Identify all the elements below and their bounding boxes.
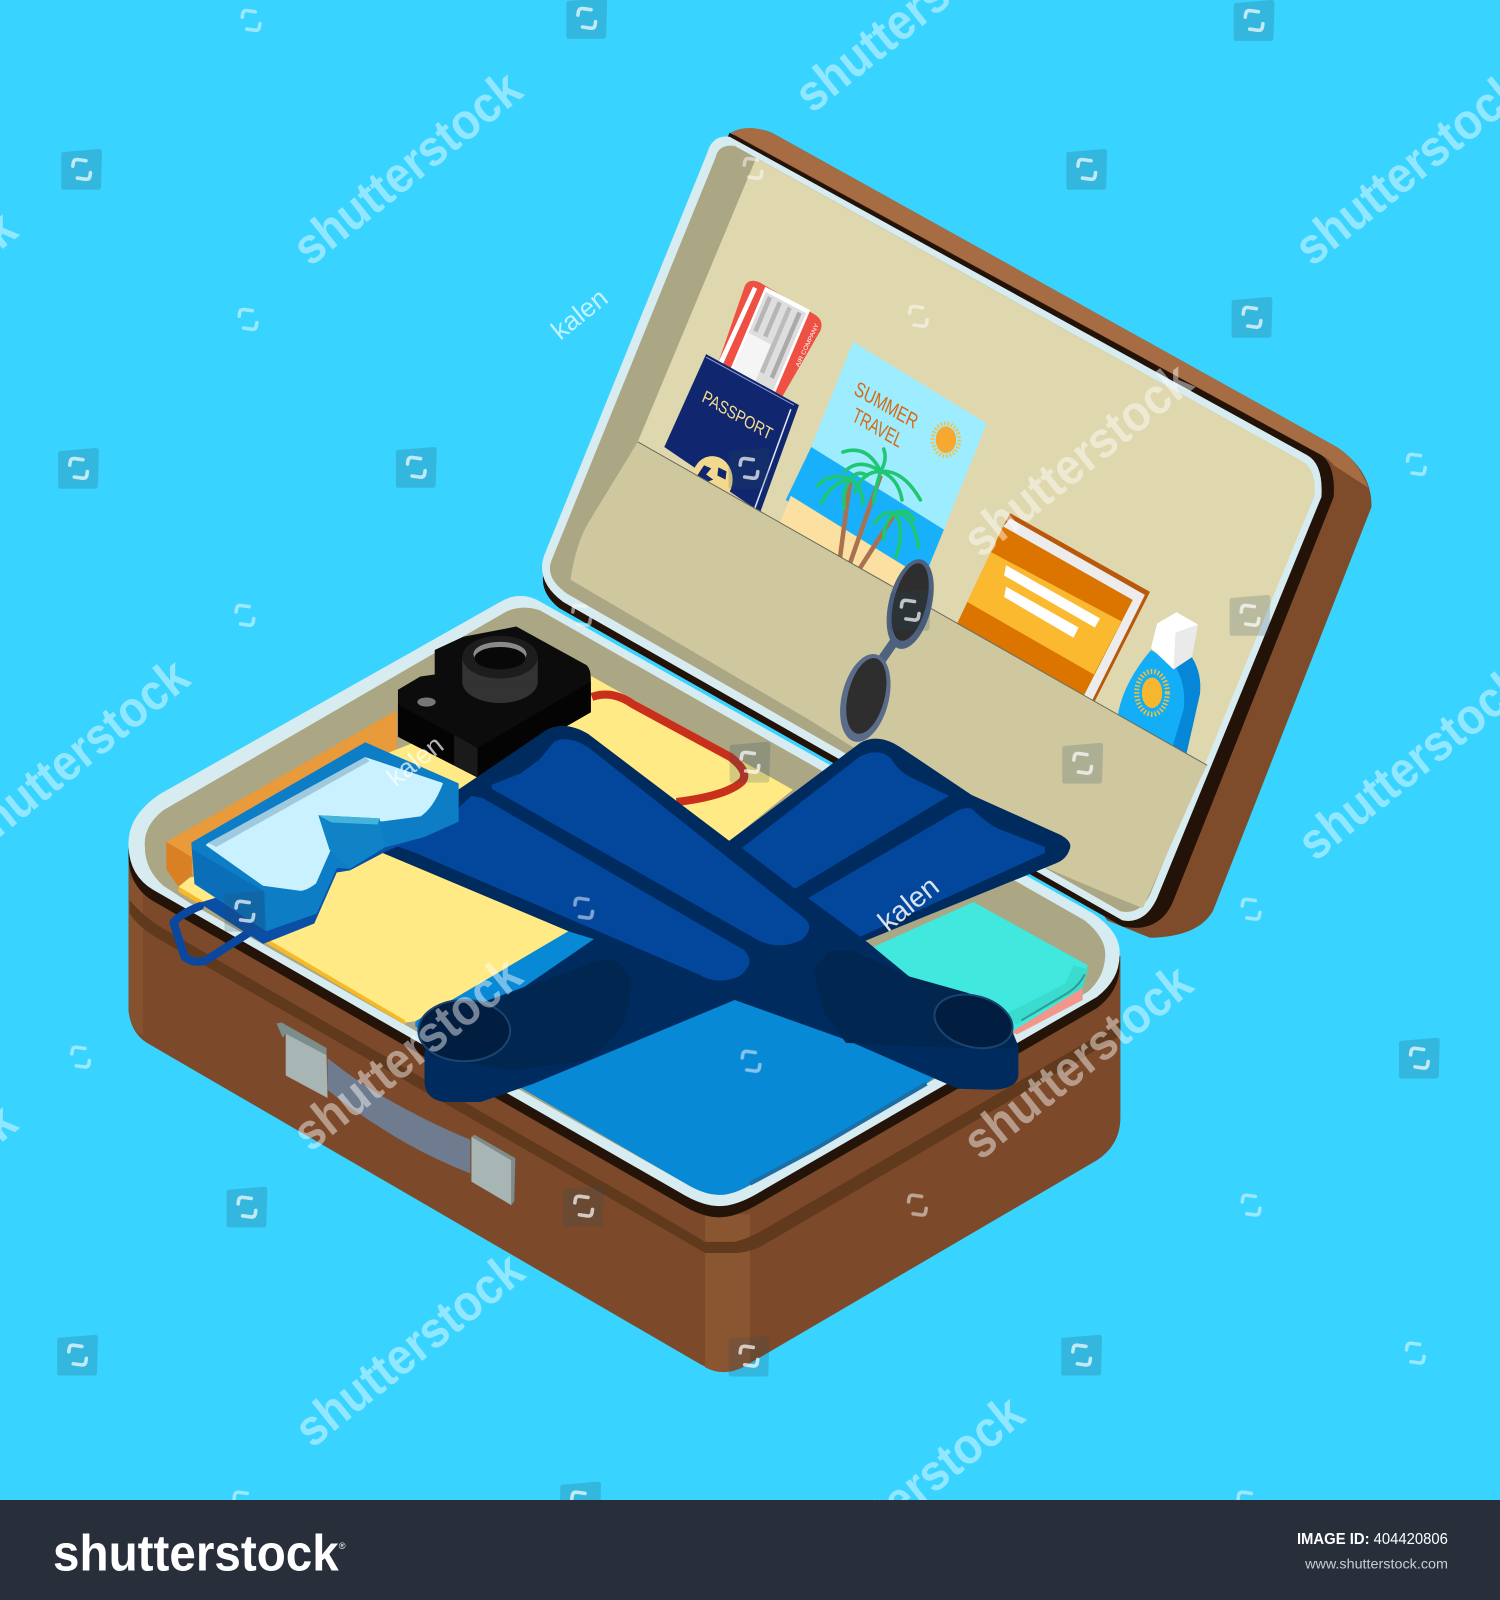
fin foot sole bbox=[427, 960, 631, 1070]
kalen marks bbox=[381, 282, 945, 938]
kalen marks: kalen bbox=[545, 282, 613, 345]
boarding ticket bbox=[718, 281, 822, 403]
packed clothes bbox=[166, 673, 1088, 1195]
camera bbox=[398, 627, 591, 778]
kalen marks: kalen bbox=[381, 729, 449, 792]
dark edge under rim bbox=[128, 607, 1120, 1217]
base rim bbox=[128, 596, 1120, 1206]
fin foot sole bbox=[813, 950, 1016, 1048]
mask nose bbox=[318, 815, 385, 868]
ticket label: AIR COMPANY bbox=[794, 323, 821, 368]
blue towel bbox=[415, 931, 949, 1195]
sunscreen bottle bbox=[1117, 612, 1200, 757]
mask frame bbox=[192, 743, 458, 931]
yellow towel lower bbox=[179, 847, 571, 1022]
bottle cap bbox=[1151, 612, 1198, 669]
watermark text: shutterstock bbox=[783, 1383, 1035, 1600]
lid inner side bbox=[550, 146, 1315, 912]
lid pocket bbox=[570, 442, 1207, 908]
book bbox=[957, 513, 1150, 707]
red trimmed item bbox=[592, 695, 744, 802]
diving mask bbox=[173, 743, 458, 962]
base body bbox=[129, 847, 1120, 1371]
suitcase base bbox=[128, 596, 1120, 1372]
case handle bbox=[277, 1022, 515, 1205]
website: www.shutterstock.com bbox=[1304, 1556, 1448, 1572]
sunglasses bbox=[832, 554, 942, 747]
lid outer shell bbox=[714, 129, 1371, 938]
fin left blade bbox=[383, 726, 1019, 1090]
teal towel bbox=[857, 902, 1088, 1033]
registered mark: ® bbox=[339, 1541, 346, 1551]
watermark text: shutterstock bbox=[952, 351, 1203, 568]
book label lines bbox=[1004, 565, 1100, 638]
ticket stripe bbox=[718, 287, 757, 365]
beach poster: TRAVEL bbox=[849, 404, 906, 453]
passport globe bbox=[692, 456, 733, 503]
footer logo: shutterstock bbox=[53, 1524, 339, 1581]
palm trees bbox=[817, 449, 920, 569]
footer bar bbox=[0, 1500, 1500, 1600]
mask strap bbox=[173, 906, 249, 962]
lid dark edge bbox=[543, 133, 1334, 928]
base interior bbox=[145, 608, 1105, 1195]
watermark text: shutterstock bbox=[281, 945, 533, 1162]
beach poster bbox=[780, 342, 987, 594]
passport: PASSPORT bbox=[700, 386, 776, 444]
passport bbox=[664, 354, 799, 512]
lid rim bbox=[542, 137, 1322, 921]
mask lens bbox=[207, 758, 442, 890]
sun bbox=[933, 423, 959, 456]
bottle sun bbox=[1137, 671, 1167, 714]
yellow towel upper bbox=[388, 673, 793, 903]
suitcase lid bbox=[542, 128, 1371, 938]
orange layer bbox=[166, 710, 397, 887]
watermark text: shutterstock bbox=[952, 953, 1203, 1170]
swim fins bbox=[383, 726, 1070, 1102]
watermark text: shutterstock bbox=[283, 1240, 535, 1458]
kalen marks: kalen bbox=[872, 870, 945, 938]
image id: IMAGE ID: 404420806 bbox=[1297, 1531, 1448, 1548]
fin right blade bbox=[418, 739, 1070, 1102]
base seam bbox=[130, 900, 1120, 1253]
pink layer bbox=[1010, 988, 1083, 1035]
watermark text: shutterstock bbox=[281, 59, 533, 276]
poster title: SUMMER bbox=[851, 377, 921, 434]
lid back panel bbox=[638, 158, 1315, 816]
